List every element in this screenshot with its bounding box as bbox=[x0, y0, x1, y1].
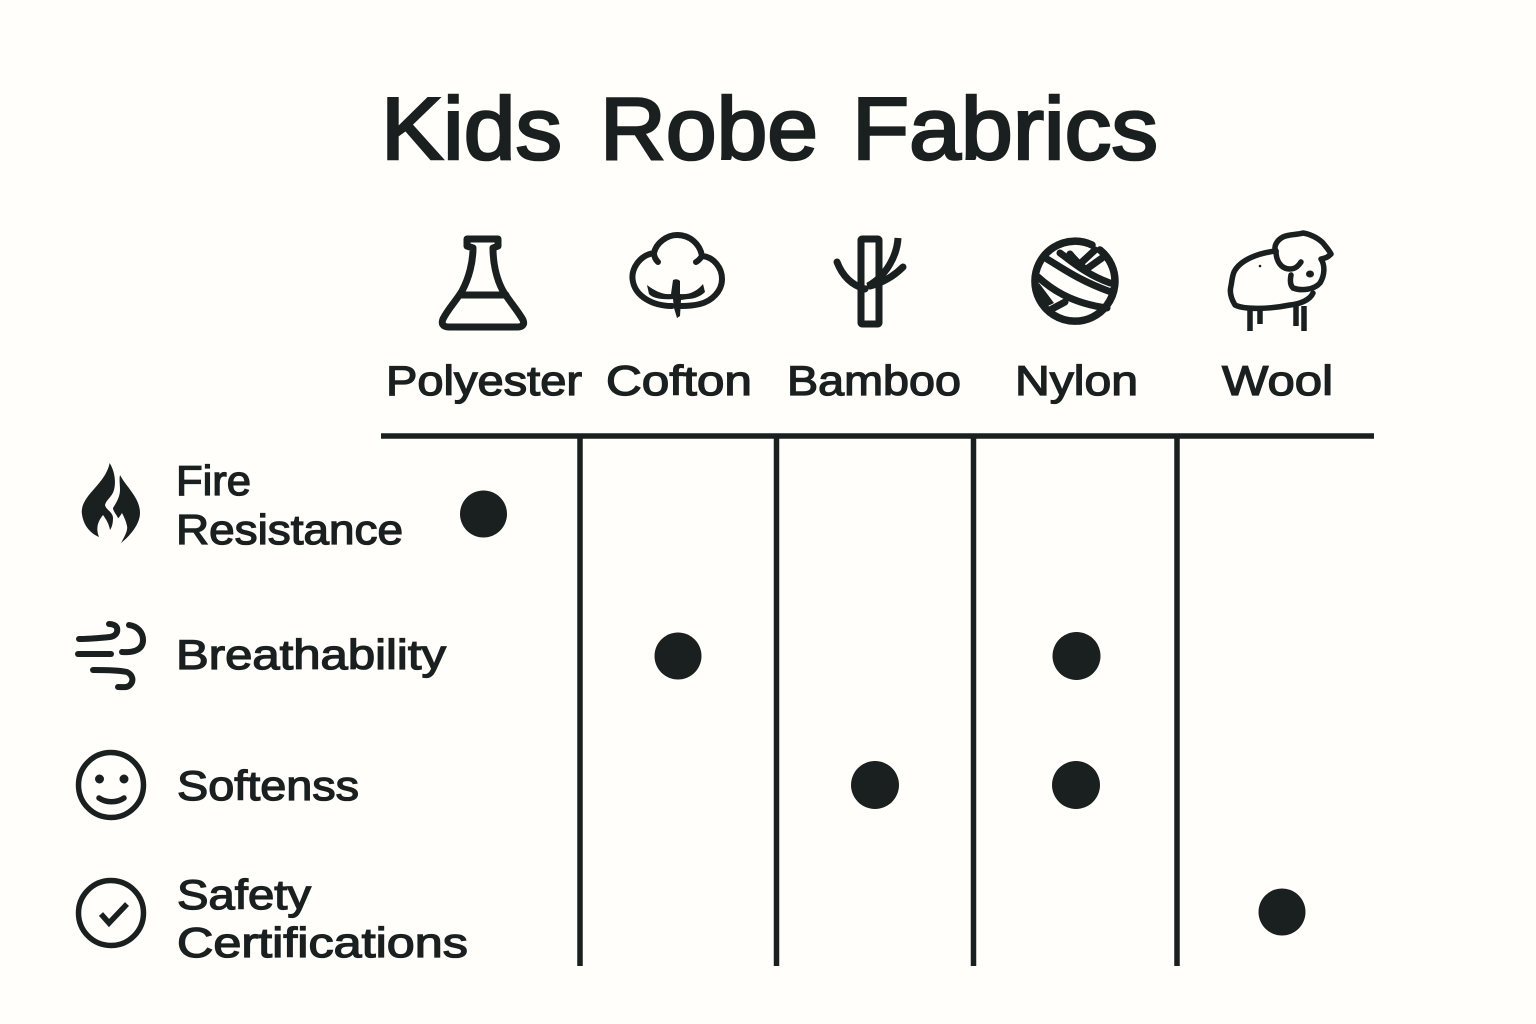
label: Safety Certifications: Certifications bbox=[177, 919, 468, 966]
dots: table marks bbox=[460, 490, 1306, 936]
label: Fire Resistance: Fire bbox=[176, 457, 251, 504]
dot: Nylon / Softness bbox=[1052, 761, 1100, 809]
label: Wool: Wool bbox=[1222, 357, 1333, 404]
row: breathability bbox=[78, 624, 446, 687]
icon: cotton bbox=[632, 235, 722, 318]
title: Fabrics bbox=[852, 79, 1158, 178]
row: safety certifications bbox=[78, 871, 468, 966]
column headers bbox=[386, 233, 1333, 404]
table grid lines bbox=[381, 436, 1374, 966]
label: Nylon: Nylon bbox=[1015, 357, 1138, 404]
icon: smiley face bbox=[78, 752, 144, 818]
label: Polyester: Polyester bbox=[386, 357, 582, 404]
icon: check circle bbox=[78, 880, 144, 946]
label: Safety Certifications: Safety bbox=[177, 871, 311, 918]
icon: flask bbox=[442, 239, 524, 327]
dot: Bamboo / Softness bbox=[851, 761, 899, 809]
label: Safety Certifications bbox=[177, 871, 468, 966]
icon: flame bbox=[82, 463, 140, 543]
label: Breathability: Breathability bbox=[176, 631, 446, 678]
title: Robe bbox=[600, 79, 818, 178]
row: softness bbox=[78, 752, 359, 818]
title: Kids bbox=[381, 79, 562, 178]
title bbox=[381, 79, 1158, 178]
dot: Cotton / Breathability bbox=[654, 632, 702, 680]
icon: yarn ball bbox=[1035, 241, 1115, 321]
dot: Polyester / Fire Resistance bbox=[460, 490, 507, 538]
label: Cofton: Cofton bbox=[606, 357, 752, 404]
label: Fire Resistance bbox=[176, 457, 403, 553]
icon: bamboo bbox=[837, 238, 903, 324]
label: Bamboo: Bamboo bbox=[787, 357, 961, 404]
icon: sheep bbox=[1230, 233, 1331, 331]
label: Softenss: Softenss bbox=[177, 762, 359, 809]
dot: Wool / Safety bbox=[1258, 888, 1306, 936]
label: Fire Resistance: Resistance bbox=[176, 506, 403, 553]
row: fire resistance bbox=[82, 457, 403, 553]
dot: Nylon / Breathability bbox=[1052, 632, 1100, 680]
icon: wind bbox=[78, 624, 143, 687]
